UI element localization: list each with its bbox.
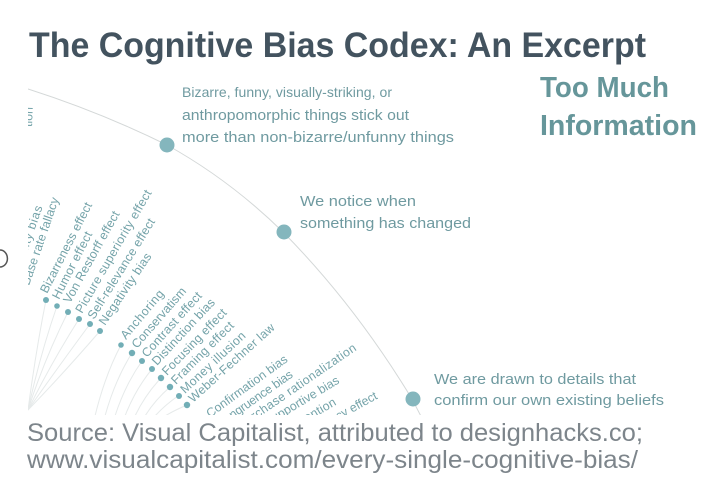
outer arc <box>28 89 424 422</box>
callout: beliefs: confirm our own existing beliefs <box>434 392 664 409</box>
branch: second bias group: Money illusion <box>177 329 249 396</box>
branch: third bias group: Selective attention <box>240 395 339 460</box>
cut-off label at top left: tion <box>21 107 36 127</box>
branch: second bias group: Conservatism <box>129 284 189 351</box>
branch: second bias group: Contrast effect <box>139 289 205 360</box>
branch: first bias group: Bizarreness effect <box>37 199 95 295</box>
callout: bizarre things <box>160 84 454 152</box>
branch: third bias group <box>207 346 378 415</box>
callout: bizarre things: Bizarre, funny, visually-striking, or <box>182 84 392 100</box>
branch: first bias group: Self-relevance effect <box>85 215 158 322</box>
branch: first bias group: Negativity bias <box>96 250 154 328</box>
branch: second bias group: Distinction bias <box>149 296 218 368</box>
branch: third bias group: Confirmation bias <box>204 352 290 420</box>
branch: first bias group: Von Restorff effect <box>60 208 123 305</box>
source text: Source: Visual Capitalist, attributed to designhacks.co; <box>27 419 643 447</box>
branch: third bias group: Choice-supportive bias <box>227 373 342 450</box>
branch: first bias group: Humor effect <box>49 229 96 301</box>
heading: too much information <box>540 72 697 142</box>
branch: first bias group <box>28 190 156 410</box>
callout: beliefs <box>406 371 664 409</box>
branch: second bias group <box>95 284 278 416</box>
branch: third bias group: Observer-expectancy effect <box>242 388 380 474</box>
callout: change <box>276 193 471 240</box>
source text <box>26 419 643 474</box>
branch: second bias group: Framing effect <box>168 318 237 387</box>
callout: change: We notice when <box>300 193 416 210</box>
callout: bizarre things: anthropomorphic things stick out <box>182 107 410 124</box>
heading: too much information: Information <box>540 110 697 142</box>
heading: too much information: Too Much <box>540 72 669 104</box>
branch: first bias group: Base rate fallacy <box>19 195 62 287</box>
title: The Cognitive Bias Codex: An Excerpt <box>29 26 646 65</box>
branch: third bias group: Congruence bias <box>214 367 295 430</box>
branch: third bias group: Post-purchase rationalization <box>211 341 359 448</box>
callout: bizarre things: more than non-bizarre/unfunny things <box>182 129 454 146</box>
source text: www.visualcapitalist.com/every-single-cognitive-bias/ <box>26 446 638 474</box>
callout: change: something has changed <box>300 215 471 232</box>
branch: first bias group: Picture superiority effect <box>72 187 155 316</box>
branch: second bias group: Anchoring <box>118 287 167 342</box>
branch: first bias group: Availability bias <box>2 204 45 297</box>
branch: second bias group: Weber-Fechner law <box>186 320 278 405</box>
cut-off letter at left edge <box>0 250 7 267</box>
callout: beliefs: We are drawn to details that <box>434 371 637 388</box>
codex diagram <box>28 88 421 415</box>
branch: second bias group: Focusing effect <box>159 305 230 378</box>
